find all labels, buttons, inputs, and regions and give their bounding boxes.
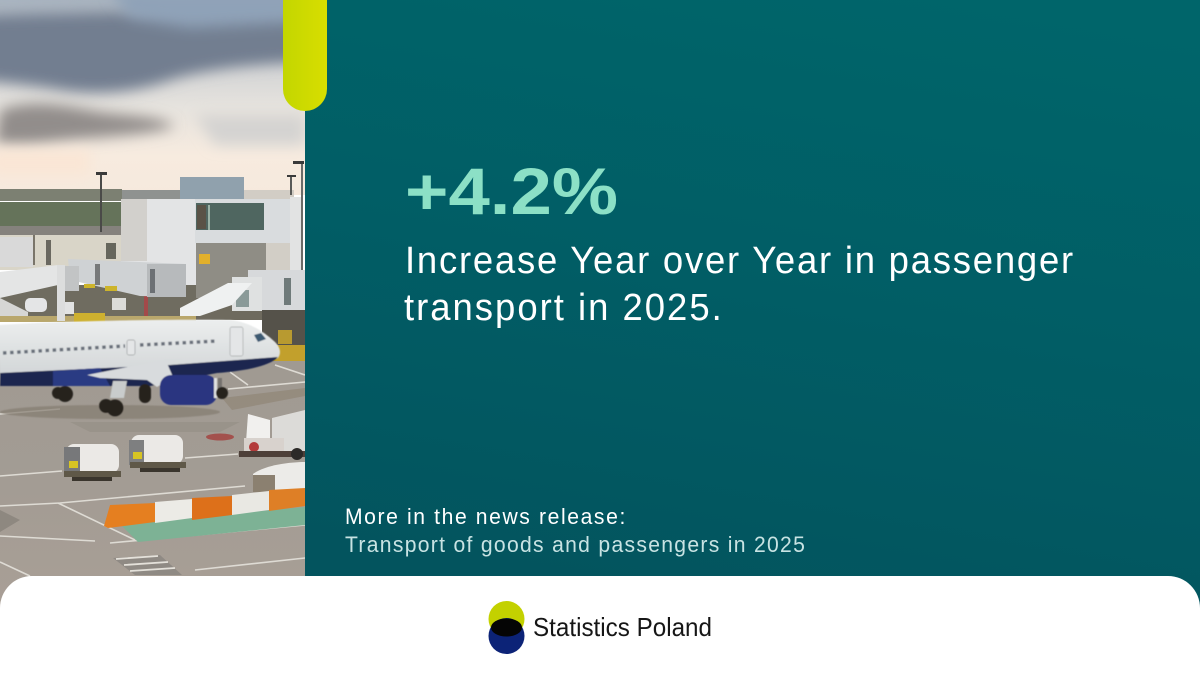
logo wordmark: Statistics Poland [533,612,712,642]
photo: parked white airliner with navy engine [0,320,280,419]
background photo: airport apron with parked airliner [0,0,305,620]
logo mark: overlapping circles [488,601,524,654]
main statement text: Increase Year over Year in passenger [405,238,1073,281]
main statement text [404,238,1073,328]
logo: Statistics Poland [488,601,712,654]
photo: white ground service vehicle [239,410,305,460]
main statement text: transport in 2025. [404,285,722,328]
photo: apron ground [0,345,305,620]
photo: terminal building and jet bridges [0,161,305,360]
news release reference: More in the news release: [345,504,625,529]
panel: teal content background [305,0,1200,620]
photo: cloudy sky [0,0,305,195]
news release reference [345,504,805,557]
lime accent tab [283,0,327,111]
footer: white band with rounded top corners [0,576,1200,675]
photo: orange and white road barriers [104,488,305,528]
photo: covered baggage carts [64,435,305,492]
news release reference: Transport of goods and passengers in 2025 [345,532,805,557]
headline figure: +4.2%: +4.2% [405,154,618,228]
